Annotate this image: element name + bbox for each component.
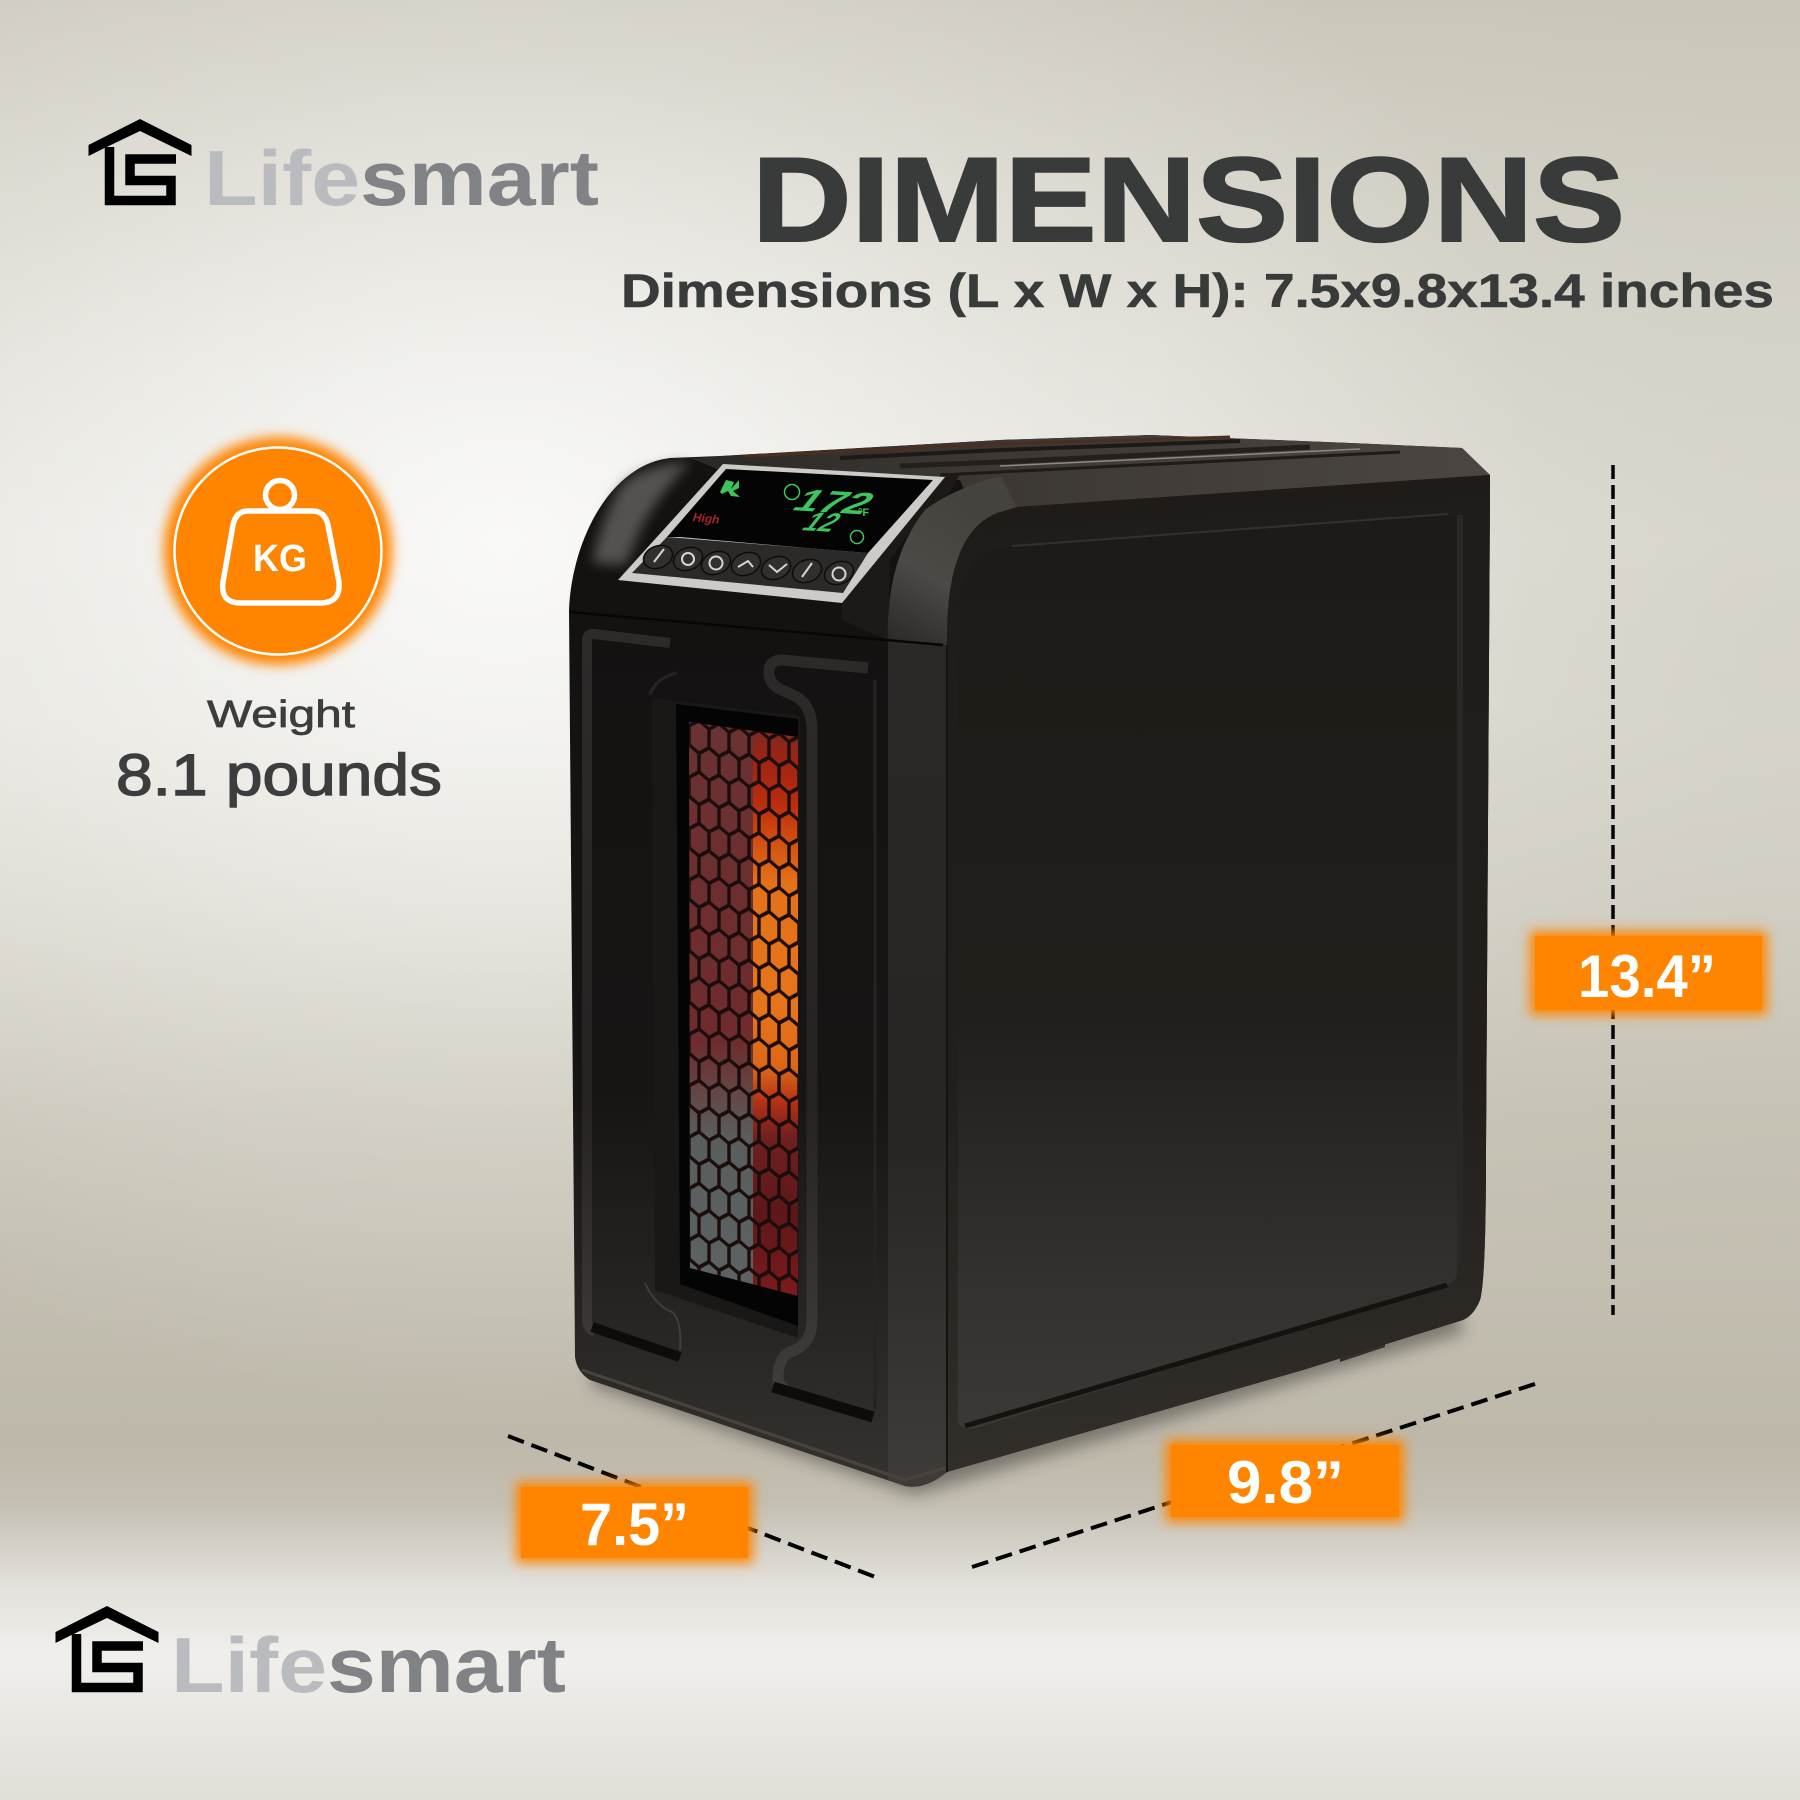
heater top face: [690, 435, 1490, 513]
corner column: [888, 645, 947, 1495]
right glow: [753, 730, 798, 1296]
slot lower right: [773, 1387, 873, 1417]
badge ring: [174, 448, 382, 654]
mode label: High: [692, 510, 720, 527]
logo: bottom Lifesmart: [56, 1606, 566, 1709]
top seam: [570, 612, 943, 645]
icon: house logo: [56, 1606, 158, 1688]
height dashed line: [1611, 465, 1615, 1315]
left maroon and steel: [689, 722, 754, 1284]
top ridges: [745, 437, 1400, 475]
logo: top Lifesmart: [88, 119, 599, 222]
front recess left: [587, 634, 670, 1332]
side panel top rim: [1012, 514, 1448, 546]
seam at corner: [946, 645, 948, 1472]
heater body: [569, 435, 1490, 1487]
label: width 9.8: [1166, 1440, 1404, 1522]
floor shadow: [590, 1300, 1465, 1495]
slot lower left: [592, 1327, 680, 1357]
icon: clock: [784, 484, 800, 500]
side panel: [958, 514, 1457, 1429]
rib curve upper left: [650, 673, 677, 695]
hex mesh: [689, 722, 798, 1296]
title: DIMENSIONS: [752, 133, 1625, 267]
bottom edge highlight: [582, 1370, 945, 1480]
panel bezel: [618, 464, 945, 603]
badge glow: [164, 437, 392, 665]
label: height 13.4: [1530, 931, 1767, 1015]
subtitle: dimensions: Dimensions (L x W x H): 7.5x9.8x13.4 inches: [621, 264, 1774, 317]
window interior: [676, 704, 798, 1326]
label: height 13.4: 13.4”: [1578, 943, 1716, 1010]
display screen: [667, 469, 933, 553]
control panel: [618, 464, 945, 603]
label: length 7.5: [516, 1482, 753, 1563]
label: length 7.5: 7.5”: [580, 1491, 689, 1558]
handle outline: [769, 660, 868, 1390]
dark band under top: [975, 475, 1490, 535]
heating element grille: [689, 722, 798, 1296]
side panel bottom edge: [965, 1285, 1447, 1426]
timer readout: 12: [795, 507, 848, 538]
unit label: °F: [858, 507, 869, 519]
button strip: [632, 537, 868, 593]
button icons: [654, 549, 846, 580]
control buttons: [640, 541, 857, 589]
weight value: 8.1 pounds: [116, 743, 442, 808]
icon: house logo: [88, 119, 192, 200]
icon: power indicator: [850, 530, 864, 544]
wordmark: Lifesmart: [204, 134, 599, 222]
label: width 9.8: 9.8”: [1227, 1449, 1344, 1516]
side outer frame: [946, 475, 1490, 1472]
dark region beside bezel: [842, 474, 960, 640]
icon: fan: [720, 480, 740, 497]
weight label: Weight: [207, 694, 356, 736]
icon: kg weight: [223, 480, 339, 603]
length dashed line: [508, 1436, 878, 1578]
kg label: KG: [253, 538, 307, 580]
weight badge: [164, 437, 392, 665]
dome highlight: [593, 462, 690, 565]
shoulder highlight: [888, 476, 1017, 645]
right front rib: [874, 680, 876, 1410]
width dashed line: [972, 1382, 1541, 1567]
side panel rib: [1457, 515, 1463, 1275]
window frame: [652, 698, 800, 1338]
wordmark: Lifesmart: [171, 1621, 566, 1709]
temperature readout: 172: [784, 484, 883, 521]
heater product: [569, 435, 1490, 1495]
rib curve lower left: [645, 1283, 680, 1350]
foot: [1340, 1340, 1385, 1362]
